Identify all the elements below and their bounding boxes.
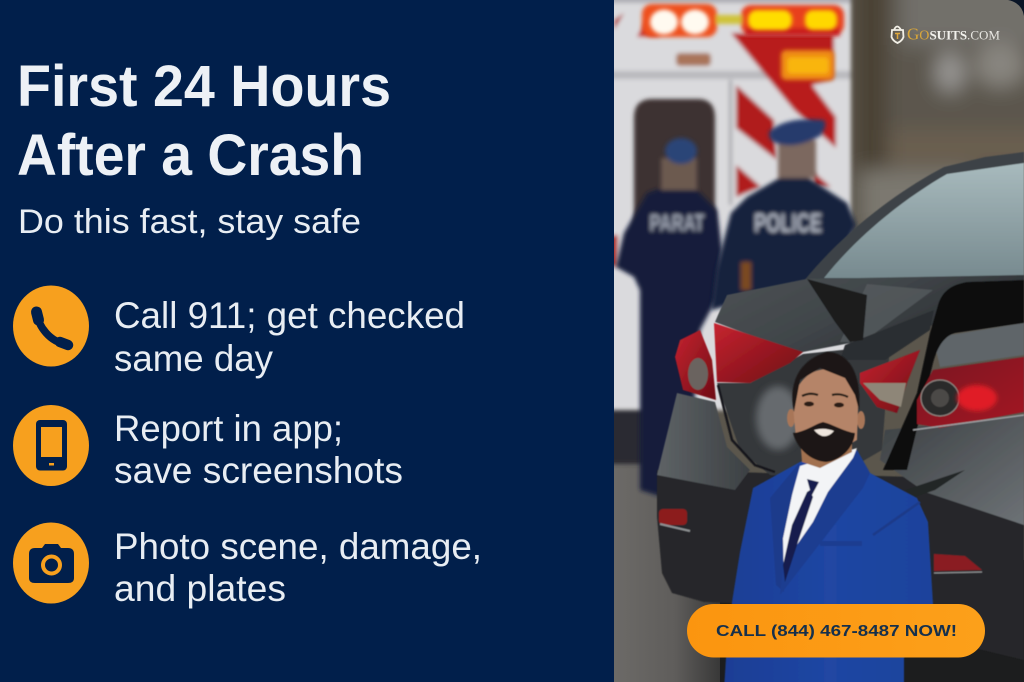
dark band under the ambulance [614, 409, 642, 466]
black crumple flap [883, 280, 1024, 470]
car roof [803, 152, 1024, 282]
damaged car [657, 152, 1024, 660]
text: report in app [114, 408, 403, 491]
officer right: POLICE [754, 208, 822, 238]
checklist item: call 911 [13, 286, 465, 379]
hair [792, 352, 859, 412]
logo: GoSuits.com [892, 24, 1000, 44]
tie [783, 479, 819, 582]
text: report in app: Report in app; [114, 408, 343, 449]
windshield [824, 163, 1024, 278]
car shadow on ground [720, 560, 1024, 682]
checklist item: photo scene [13, 522, 482, 609]
button: call to action [687, 604, 985, 658]
attorney portrait [724, 352, 933, 682]
right lapel [780, 450, 870, 595]
left fender [657, 393, 750, 490]
icon: camera [13, 522, 89, 604]
left lapel [770, 462, 800, 592]
icon: phone [13, 286, 89, 366]
trunk centre panel [717, 345, 890, 480]
neck [800, 444, 853, 468]
checklist item: report in app [13, 405, 403, 491]
photo: crash scene [600, 0, 1024, 682]
icon: lock [892, 26, 904, 43]
title [17, 54, 391, 188]
title: First 24 Hours [17, 54, 391, 119]
panel: left navy background [0, 0, 614, 682]
blurred background trees [854, 0, 1024, 225]
pocket [820, 541, 862, 546]
police officers [616, 119, 856, 500]
officer right [711, 119, 856, 310]
icon: smartphone [13, 405, 89, 486]
text: photo scene: Photo scene, damage, [114, 526, 482, 567]
suit [724, 450, 933, 682]
beard [793, 422, 855, 462]
ambulance [600, 0, 851, 410]
text: report in app: save screenshots [114, 450, 403, 491]
ears [787, 409, 795, 427]
officer left: PARAT [650, 210, 705, 237]
eyes [802, 394, 848, 408]
text: call 911: same day [114, 338, 273, 379]
right body panel [880, 415, 1024, 525]
left tail lights [675, 323, 803, 400]
dent [807, 279, 867, 342]
lower bumper [657, 470, 1024, 660]
button: call to action: CALL (844) 467-8487 NOW! [716, 623, 957, 640]
text: photo scene: and plates [114, 568, 286, 609]
ambulance door window [634, 99, 715, 240]
top-right rounded corner [1008, 0, 1024, 16]
trunk lid [715, 275, 1024, 354]
road left of the car [614, 463, 720, 682]
text: call 911: Call 911; get checked [114, 295, 465, 336]
warning lights [642, 4, 844, 80]
shirt [783, 448, 857, 565]
text: photo scene [114, 526, 482, 609]
face [793, 368, 859, 444]
wordmark: GOSUITS.COM [907, 24, 1000, 44]
text: call 911 [114, 295, 465, 379]
smile [814, 429, 834, 436]
title: After a Crash [17, 123, 364, 188]
right tail lights [860, 350, 1024, 430]
sleeve crease [873, 502, 920, 535]
officer left [616, 138, 722, 500]
right panel above tail light [933, 323, 1024, 367]
subtitle: Do this fast, stay safe [18, 203, 361, 241]
reflectors [659, 509, 982, 573]
